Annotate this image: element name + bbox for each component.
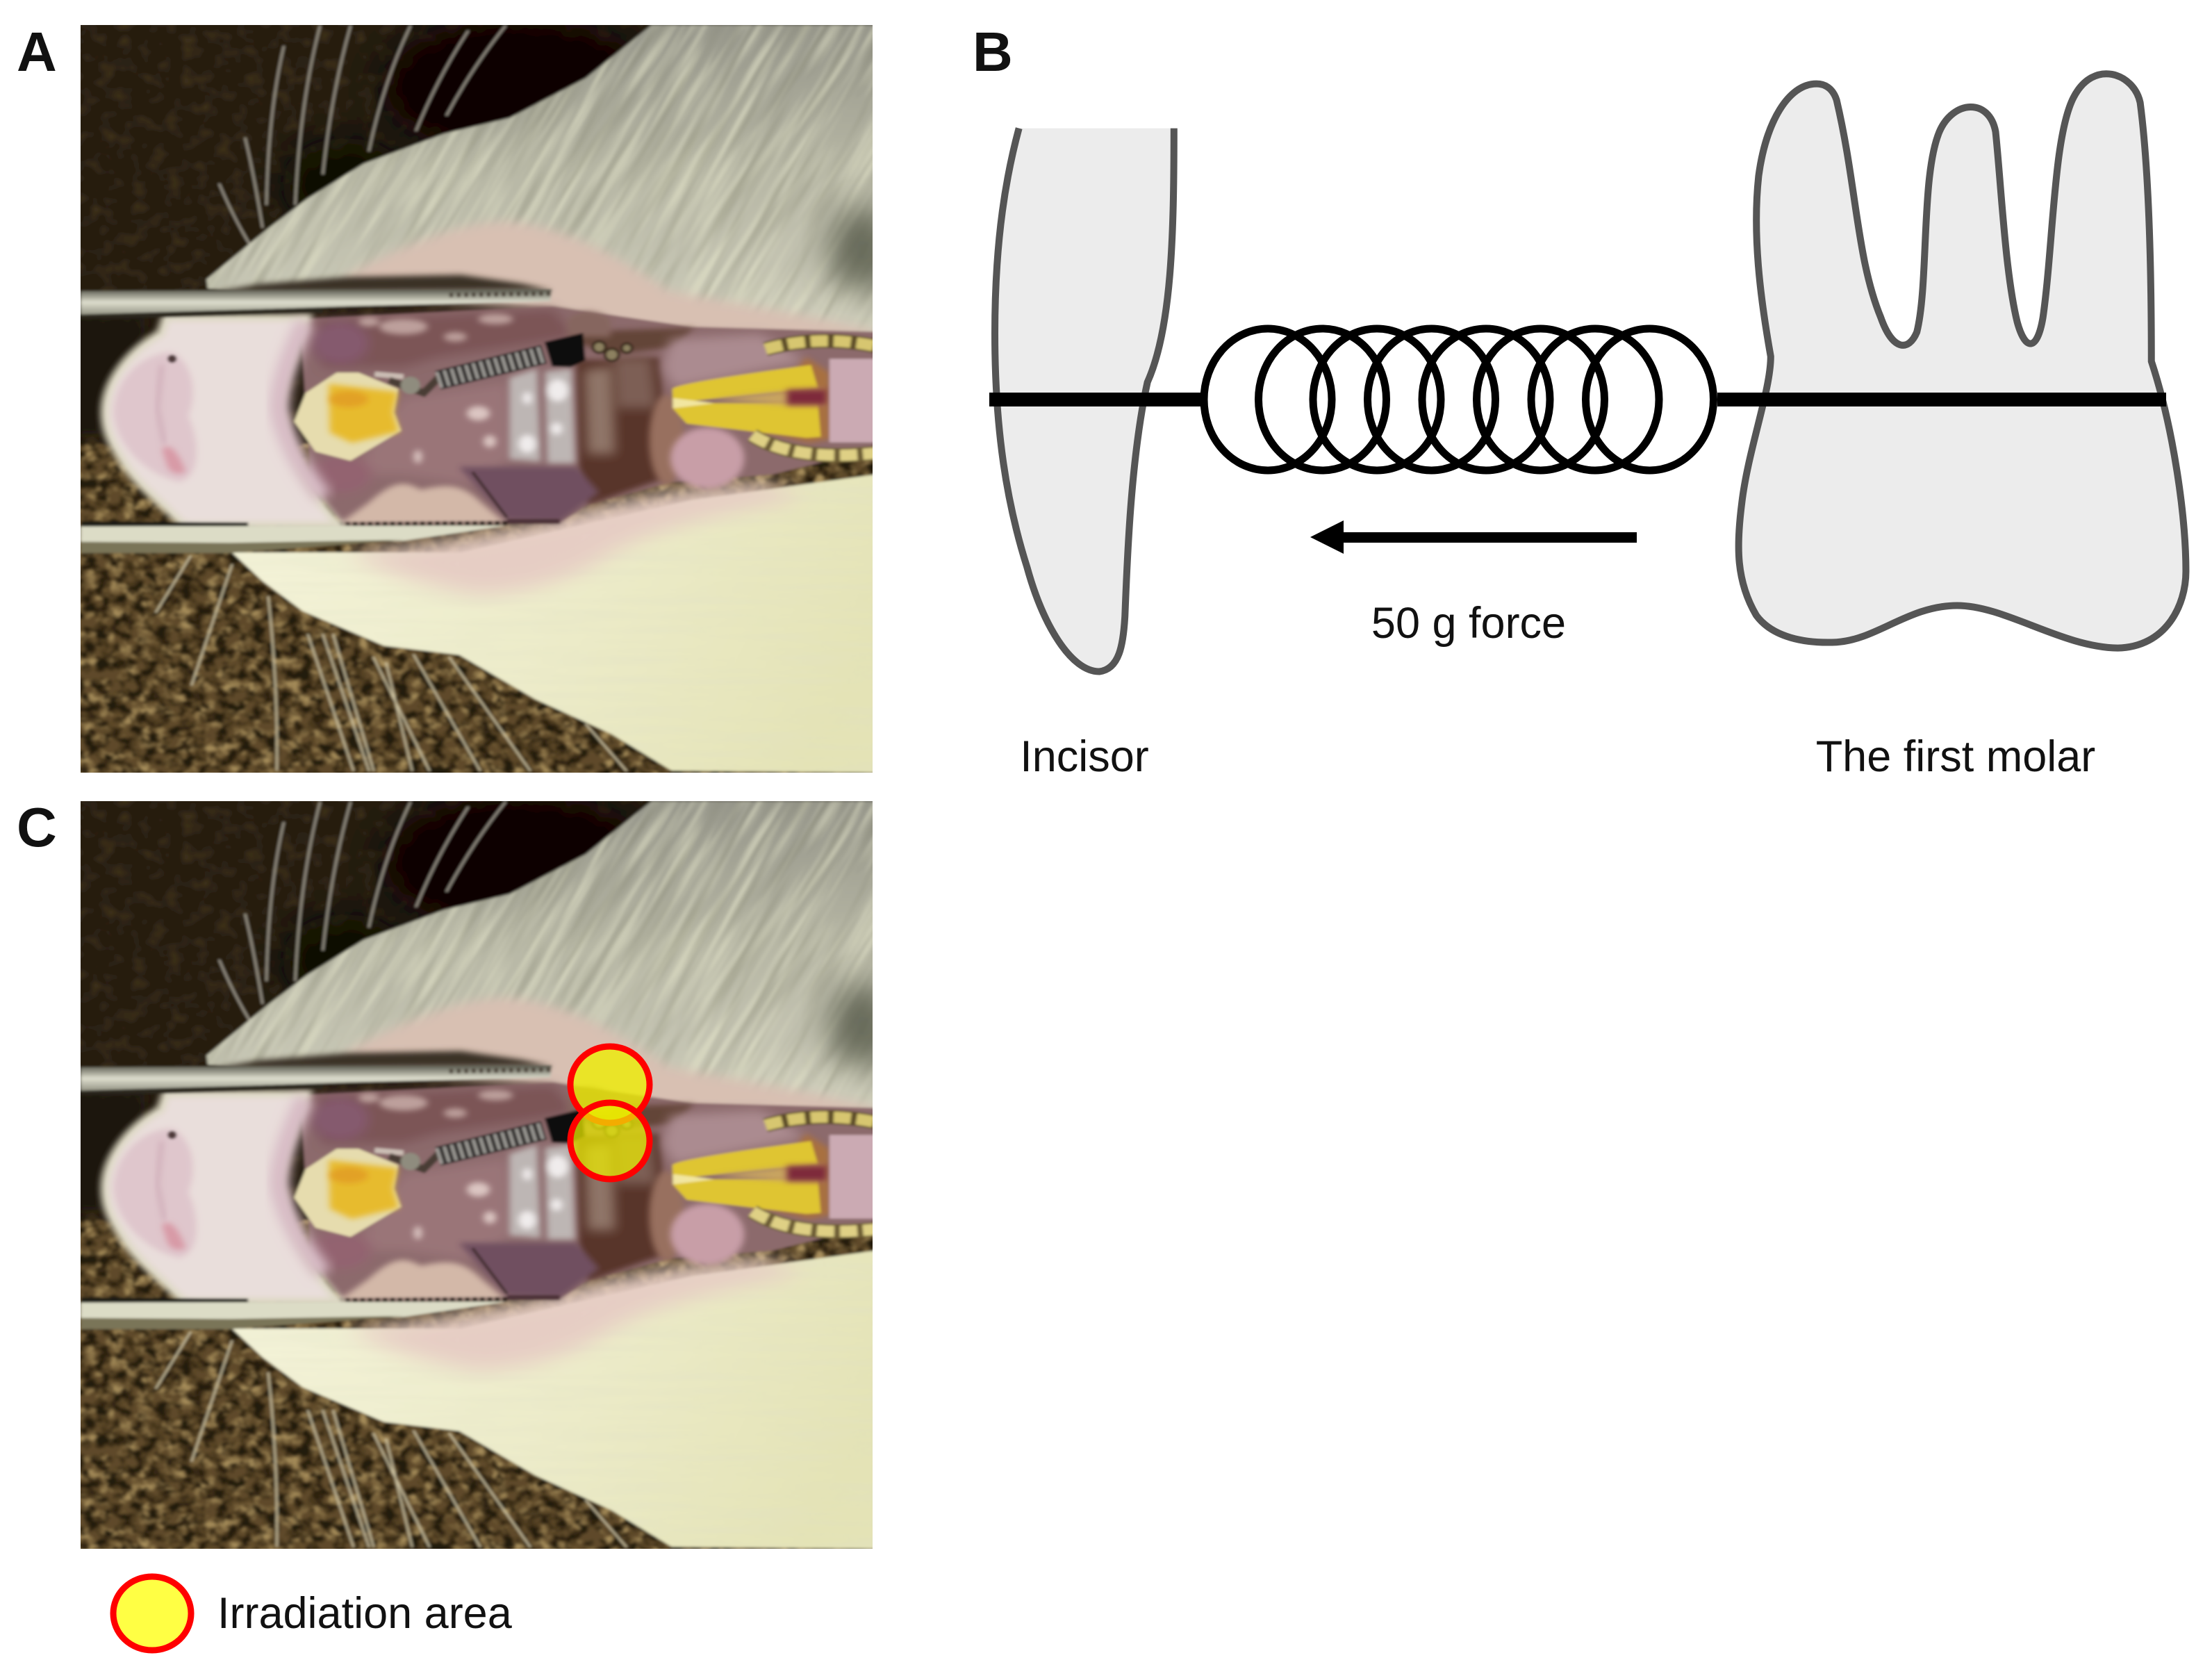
- whiskers below: [156, 556, 626, 771]
- spring: [374, 374, 404, 377]
- first molar outline: [1739, 74, 2186, 648]
- incisor tooth outline: [995, 129, 1174, 672]
- panel A: photo of rat mouth with spring: [81, 25, 873, 773]
- upper lip skin: [346, 222, 875, 347]
- tweezers: [208, 274, 552, 293]
- coil spring: [1204, 329, 1713, 470]
- gold rope: [766, 341, 875, 349]
- background above: [58, 10, 893, 444]
- mouth interior: [300, 306, 875, 528]
- legend: irradiation area: Irradiation area: [217, 1589, 513, 1638]
- legend: irradiation area: [113, 1577, 513, 1650]
- force arrow: [1310, 520, 1637, 554]
- lower fur: [232, 475, 875, 773]
- background below: [58, 439, 893, 775]
- wire through teeth: [989, 393, 2166, 406]
- label: the first molar: The first molar: [1816, 732, 2095, 781]
- molars: [509, 368, 540, 462]
- panel label A: A: [17, 21, 57, 83]
- label: incisor: Incisor: [1020, 732, 1149, 781]
- panel B: spring schematic: [989, 74, 2186, 781]
- whiskers above: [220, 26, 505, 256]
- lower serration: [338, 523, 507, 525]
- snout: [105, 318, 340, 525]
- panel C: photo with irradiation areas: [81, 801, 873, 1549]
- panel label B: B: [973, 21, 1013, 83]
- label: 50 g force: 50 g force: [1371, 599, 1566, 648]
- irradiation circles on photo: [570, 1046, 650, 1179]
- yellow rubber retractor: [749, 357, 831, 443]
- incisor: [294, 372, 401, 461]
- upper fur: [206, 25, 875, 342]
- panel label C: C: [17, 796, 57, 858]
